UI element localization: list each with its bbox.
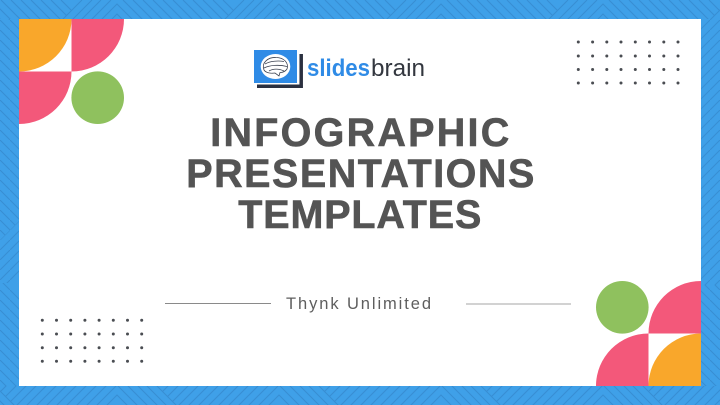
- orange quarter circle: [648, 334, 701, 386]
- top-left geometric shapes: [19, 19, 124, 124]
- pink quarter circle, left: [596, 334, 648, 386]
- pink quarter circle, left: [19, 72, 72, 124]
- slidesbrain logo: [254, 50, 425, 86]
- green circle: [71, 71, 124, 124]
- orange quarter circle: [19, 19, 72, 72]
- subtitle text: Thynk Unlimited: [286, 295, 431, 313]
- title line 2: PRESENTATIONS: [186, 152, 534, 196]
- dot grid, bottom left: [41, 319, 143, 363]
- green circle: [596, 281, 649, 334]
- pink quarter circle, top: [72, 19, 124, 72]
- title: [186, 111, 534, 237]
- pink quarter circle, top: [648, 281, 701, 334]
- dot grid, top right: [577, 40, 680, 84]
- logo wordmark: slides: slides: [307, 55, 370, 82]
- logo wordmark: brain: brain: [371, 55, 425, 82]
- logo icon: brain on monitor: [254, 50, 301, 86]
- bottom-right geometric shapes: [596, 281, 701, 386]
- title line 1: INFOGRAPHIC: [210, 111, 509, 155]
- title line 3: TEMPLATES: [238, 193, 481, 237]
